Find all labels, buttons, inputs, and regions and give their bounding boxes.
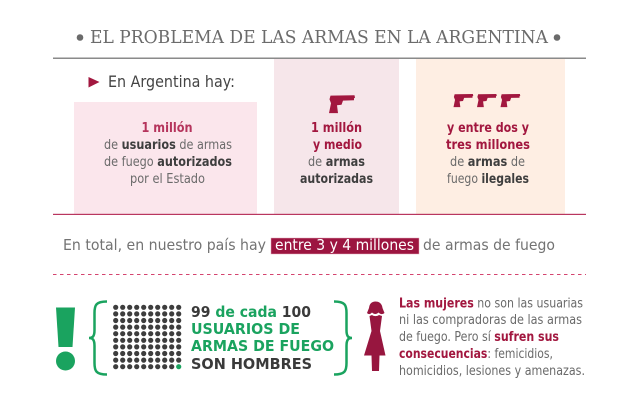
right brace [334, 302, 352, 374]
heading: en Argentina hay: En Argentina hay: [108, 72, 235, 91]
panel: usuarios autorizados [74, 102, 257, 214]
panel: armas ilegales: fuego ilegales [447, 172, 529, 187]
statistic text: SON HOMBRES [191, 355, 312, 373]
panel: armas autorizadas: autorizadas [300, 172, 373, 187]
statistic text: 99 de cada 100 [191, 303, 311, 321]
text block: las mujeres: Las mujeres no son las usuarias [399, 296, 583, 312]
panel: armas autorizadas: y medio [313, 138, 362, 153]
total statement [63, 236, 555, 254]
left brace [89, 302, 107, 374]
panel: usuarios autorizados: 1 millón [142, 121, 192, 136]
panel: armas ilegales: tres millones [446, 138, 530, 153]
panel: armas autorizadas: de armas [308, 155, 365, 170]
text block: las mujeres: ni las compradoras de las armas [399, 313, 582, 328]
dot grid: 99 de cada 100 [113, 305, 181, 369]
text block: las mujeres: homicidios, lesiones y amenazas. [399, 364, 585, 379]
total statement: En total, en nuestro país hay [63, 236, 266, 254]
statistic text: ARMAS DE FUEGO [191, 337, 334, 355]
panel: armas autorizadas [274, 59, 399, 214]
panel: armas ilegales [416, 59, 565, 214]
statistic text [191, 303, 334, 373]
statistic text: USUARIOS DE [191, 320, 300, 338]
total statement: entre 3 y 4 millones [275, 236, 414, 254]
panel: usuarios autorizados: por el Estado [130, 172, 205, 187]
title: EL PROBLEMA DE LAS ARMAS EN LA ARGENTINA [90, 27, 549, 48]
icon: three pistols [454, 94, 520, 107]
panel: armas ilegales: de armas de [450, 155, 525, 170]
icon: woman [364, 302, 386, 371]
panel: usuarios autorizados: de usuarios de armas [104, 138, 232, 153]
text block: las mujeres: consecuencias: femicidios, [399, 347, 553, 362]
panel: armas autorizadas: 1 millón [311, 121, 362, 136]
panel: armas ilegales: y entre dos y [447, 121, 529, 136]
panel: usuarios autorizados: de fuego autorizados [104, 155, 232, 170]
text block: las mujeres [399, 296, 585, 379]
icon: pistol [329, 95, 355, 113]
icon: exclamation mark [56, 308, 75, 370]
text block: las mujeres: de fuego. Pero sí sufren sus [399, 330, 559, 345]
total statement: de armas de fuego [423, 236, 555, 254]
